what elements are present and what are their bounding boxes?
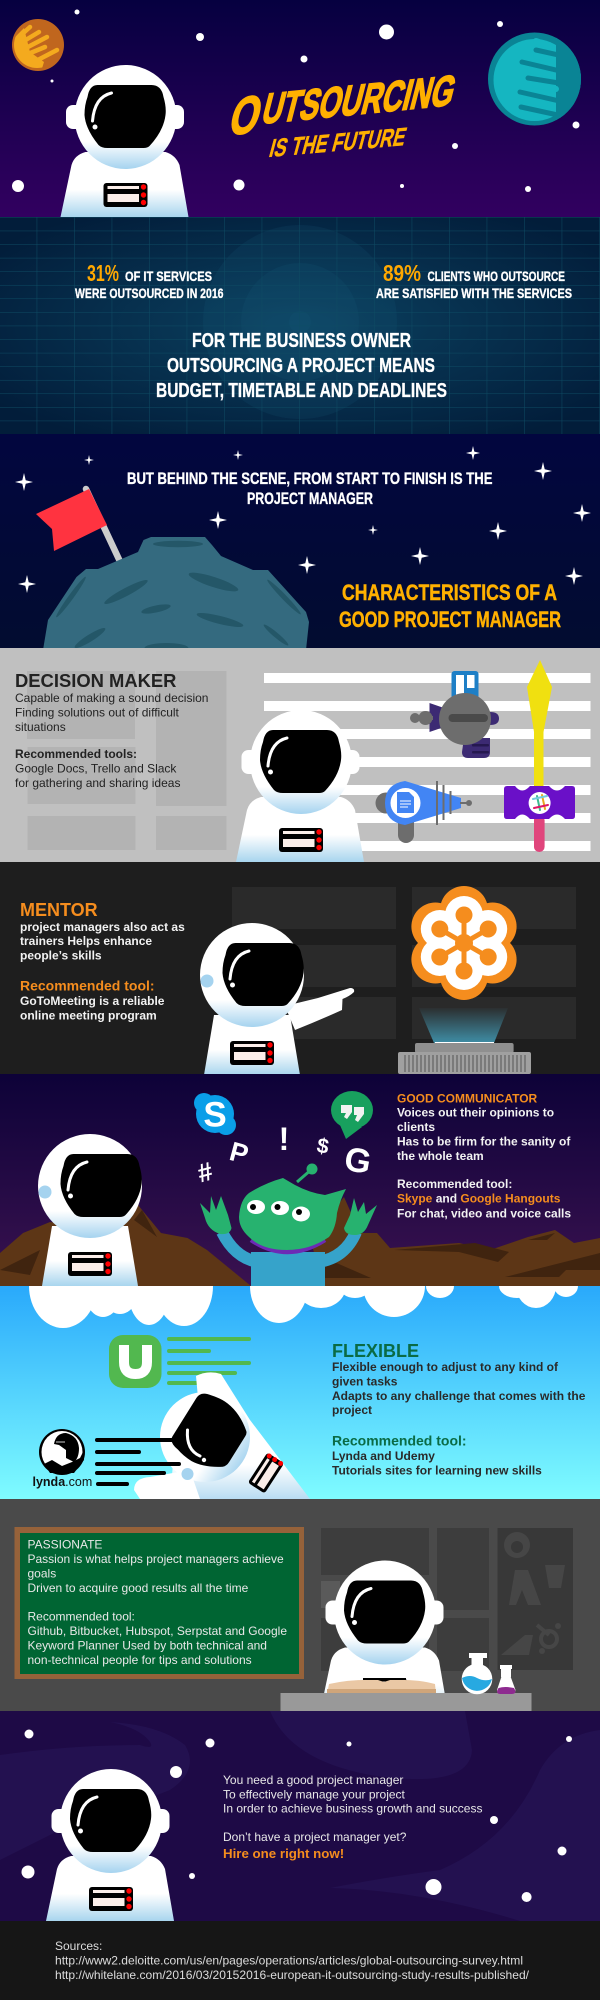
title: IS THE FUTURE bbox=[266, 123, 409, 163]
communicator text: For chat, video and voice calls bbox=[397, 1206, 571, 1220]
moon with craters bbox=[43, 537, 309, 653]
tool logos board bbox=[498, 1528, 573, 1670]
chalkboard: goals bbox=[28, 1567, 56, 1581]
chalkboard: Keyword Planner Used by both technical and bbox=[28, 1639, 267, 1653]
mentor text: project managers also act as bbox=[20, 920, 185, 934]
business owner statement: OUTSOURCING A PROJECT MEANS bbox=[167, 354, 435, 377]
icon: google docs ray gun bbox=[376, 781, 472, 843]
floating characters bbox=[194, 1121, 374, 1188]
sources text bbox=[55, 1939, 530, 1982]
mentor text: GoToMeeting is a reliable bbox=[20, 994, 165, 1008]
sources text: Sources: bbox=[55, 1939, 102, 1953]
business owner statement bbox=[156, 329, 447, 402]
panel: project manager intro bbox=[0, 434, 600, 653]
panel: good communicator bbox=[0, 1074, 600, 1286]
stat: 31 percent bbox=[75, 260, 224, 301]
flexible text: Tutorials sites for learning new skills bbox=[332, 1464, 542, 1478]
alien bbox=[200, 1164, 377, 1286]
panel: call to action bbox=[0, 1711, 600, 1921]
sources text: http://whitelane.com/2016/03/20152016-european-it-outsourcing-study-results-published/ bbox=[55, 1968, 530, 1982]
communicator text: clients bbox=[397, 1120, 435, 1134]
chalkboard: non-technical people for tips and solutions bbox=[28, 1653, 252, 1667]
astronaut bbox=[60, 65, 188, 217]
header star dots bbox=[12, 10, 580, 192]
floating characters: ! bbox=[279, 1121, 289, 1157]
grid background bbox=[0, 217, 600, 434]
flexible text: Lynda and Udemy bbox=[332, 1449, 435, 1463]
space background bbox=[0, 1711, 600, 1921]
mentor background bbox=[0, 862, 600, 1074]
flexible text: given tasks bbox=[332, 1375, 398, 1389]
nebula swirls bbox=[0, 1711, 600, 1921]
astronaut bbox=[200, 923, 304, 1075]
floating characters: $ bbox=[315, 1134, 331, 1159]
stat: 31 percent: OF IT SERVICES bbox=[125, 268, 212, 284]
call to action text: Don’t have a project manager yet? bbox=[223, 1830, 407, 1844]
communicator text bbox=[397, 1091, 571, 1220]
astronaut bbox=[324, 1560, 445, 1693]
chalkboard: PASSIONATE bbox=[28, 1537, 102, 1551]
pointing arm bbox=[285, 988, 354, 1030]
mentor text: MENTOR bbox=[20, 900, 98, 920]
communicator text: Skype and Google Hangouts bbox=[397, 1192, 561, 1206]
icon: lynda bbox=[32, 1429, 92, 1489]
sky background bbox=[0, 1286, 600, 1499]
mentor text: Recommended tool: bbox=[20, 978, 155, 994]
stat: 31 percent: 31% bbox=[87, 260, 119, 286]
astronaut bbox=[236, 710, 364, 862]
flexible text: project bbox=[332, 1403, 372, 1417]
intro text bbox=[127, 470, 492, 508]
panel: statistics grid bbox=[0, 217, 600, 434]
icon: gotomeeting bbox=[411, 886, 517, 1000]
decision text bbox=[15, 670, 208, 790]
panel: flexible bbox=[0, 1286, 600, 1499]
stat: 31 percent: WERE OUTSOURCED IN 2016 bbox=[75, 285, 224, 301]
icon: slack sword bbox=[504, 660, 575, 852]
book bbox=[327, 1678, 436, 1694]
mentor text: online meeting program bbox=[20, 1008, 157, 1022]
icon: blue flask bbox=[462, 1653, 492, 1694]
flexible text bbox=[332, 1341, 586, 1478]
call to action text: Hire one right now! bbox=[223, 1846, 344, 1861]
floating characters: G bbox=[342, 1140, 374, 1182]
mentor text: people’s skills bbox=[20, 948, 102, 962]
star dots bbox=[22, 1730, 572, 1902]
floating characters: P bbox=[226, 1136, 252, 1170]
flexible text: FLEXIBLE bbox=[332, 1341, 419, 1361]
passionate background bbox=[0, 1499, 600, 1711]
sources background bbox=[0, 1921, 600, 2000]
stat: 89 percent bbox=[376, 260, 572, 301]
decision text: situations bbox=[15, 720, 66, 734]
title bbox=[224, 65, 461, 163]
flexible text: Recommended tool: bbox=[332, 1433, 467, 1449]
chalkboard bbox=[14, 1527, 304, 1679]
icon: google hangouts bbox=[331, 1091, 373, 1139]
astronaut bbox=[46, 1769, 174, 1921]
title: UTSOURCING bbox=[257, 67, 461, 134]
decision text: Recommended tools: bbox=[15, 747, 137, 761]
communicator background bbox=[0, 1074, 600, 1286]
communicator text: the whole team bbox=[397, 1149, 484, 1163]
starfield background bbox=[0, 434, 600, 648]
flexible text: Adapts to any challenge that comes with the bbox=[332, 1389, 586, 1403]
radar circles bbox=[203, 225, 397, 419]
call to action text bbox=[223, 1773, 482, 1861]
decision text: for gathering and sharing ideas bbox=[15, 776, 180, 790]
icon: purple flask bbox=[497, 1665, 516, 1694]
panel: header bbox=[0, 0, 600, 217]
four point stars bbox=[15, 446, 591, 593]
heading: characteristics bbox=[339, 580, 561, 632]
chalkboard: Recommended tool: bbox=[28, 1610, 135, 1624]
decision text: Capable of making a sound decision bbox=[15, 691, 208, 705]
business owner statement: FOR THE BUSINESS OWNER bbox=[192, 329, 411, 352]
call to action text: To effectively manage your project bbox=[223, 1787, 406, 1801]
decision text: DECISION MAKER bbox=[15, 670, 176, 691]
call to action text: In order to achieve business growth and success bbox=[223, 1802, 482, 1816]
business owner statement: BUDGET, TIMETABLE AND DEADLINES bbox=[156, 379, 447, 402]
header background bbox=[0, 0, 600, 217]
decision text: Google Docs, Trello and Slack bbox=[15, 762, 177, 776]
mountains bbox=[0, 1197, 600, 1286]
stat: 89 percent: 89% bbox=[383, 260, 421, 286]
decision text: Finding solutions out of difficult bbox=[15, 706, 180, 720]
chalkboard: Github, Bitbucket, Hubspot, Serpstat and Google bbox=[28, 1624, 287, 1638]
communicator text: Voices out their opinions to bbox=[397, 1106, 554, 1120]
panel: sources bbox=[0, 1921, 600, 2000]
communicator text: GOOD COMMUNICATOR bbox=[397, 1091, 538, 1105]
panel: mentor bbox=[0, 862, 600, 1075]
hologram projector bbox=[398, 1008, 531, 1074]
panel: passionate bbox=[0, 1499, 600, 1712]
icon: flag bbox=[36, 489, 124, 570]
flexible text: Flexible enough to adjust to any kind of bbox=[332, 1360, 559, 1374]
chalkboard: Driven to acquire good results all the time bbox=[28, 1581, 249, 1595]
sources text: http://www2.deloitte.com/us/en/pages/operations/articles/global-outsourcing-survey.html bbox=[55, 1954, 523, 1968]
mentor text: trainers Helps enhance bbox=[20, 934, 152, 948]
icon: udemy bbox=[109, 1335, 249, 1388]
icon: lynda: lynda.com bbox=[32, 1475, 92, 1489]
floating characters: # bbox=[194, 1156, 216, 1188]
icon: teal planet bbox=[488, 32, 581, 126]
flying astronaut bbox=[134, 1372, 310, 1499]
call to action text: You need a good project manager bbox=[223, 1773, 403, 1787]
speed lines bbox=[97, 1440, 179, 1484]
icon: orange planet bbox=[12, 19, 64, 71]
icon: skype bbox=[194, 1093, 236, 1135]
title: O bbox=[224, 84, 268, 147]
panel: decision maker bbox=[0, 648, 600, 862]
mentor text bbox=[20, 900, 185, 1022]
astronaut bbox=[38, 1134, 142, 1286]
intro text: PROJECT MANAGER bbox=[247, 490, 373, 508]
clouds bbox=[29, 1286, 578, 1328]
chalkboard: Passion is what helps project managers achieve bbox=[28, 1552, 284, 1566]
communicator text: Recommended tool: bbox=[397, 1177, 512, 1191]
communicator text: Has to be firm for the sanity of bbox=[397, 1135, 571, 1149]
decision background bbox=[0, 648, 600, 862]
icon: skype: S bbox=[203, 1096, 227, 1134]
table bbox=[280, 1693, 532, 1711]
icon: trello ray gun bbox=[410, 671, 499, 758]
intro text: BUT BEHIND THE SCENE, FROM START TO FINISH IS THE bbox=[127, 470, 492, 488]
